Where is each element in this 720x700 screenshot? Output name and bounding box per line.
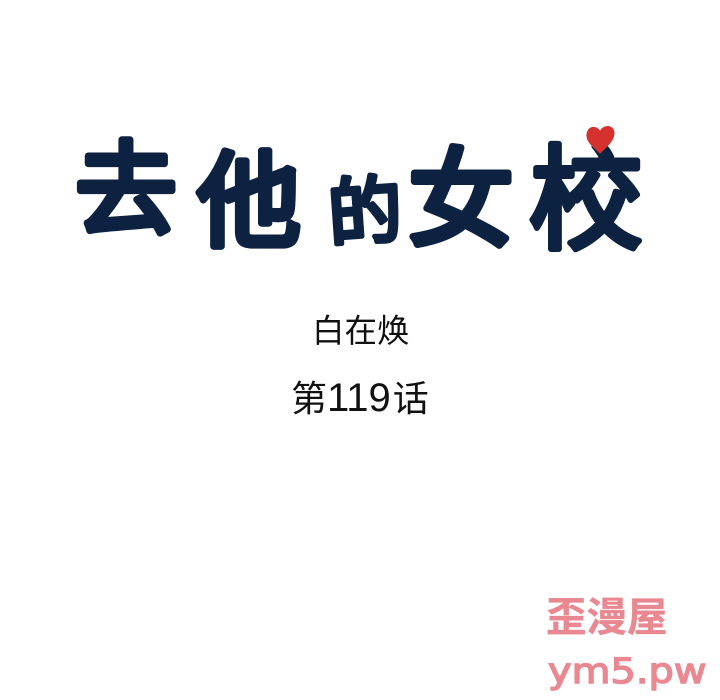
title character: 的: 的	[325, 168, 405, 256]
watermark	[546, 594, 706, 691]
author name: 白在焕	[312, 313, 410, 349]
title character: 校: 校	[529, 138, 643, 265]
title logo	[75, 126, 643, 265]
watermark: site name: 歪漫屋	[546, 594, 668, 640]
icon: red heart	[587, 126, 614, 153]
title character: 他: 他	[197, 145, 301, 261]
chapter number: 第119话	[291, 376, 429, 420]
title character: 女: 女	[408, 142, 514, 260]
watermark: site address: ym5.pw	[548, 650, 706, 691]
title character: 去: 去	[75, 134, 177, 248]
